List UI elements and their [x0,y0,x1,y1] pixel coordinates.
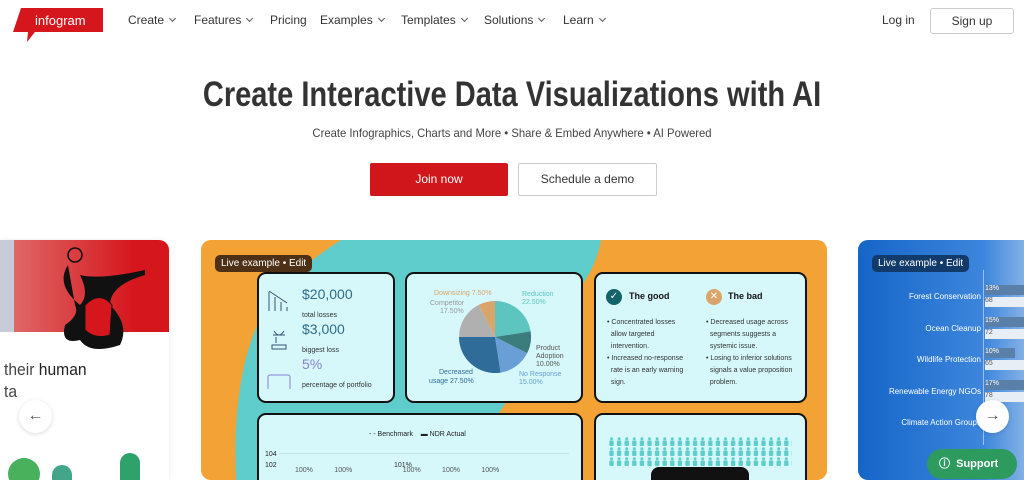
card: right: Forest Conservation [909,292,981,301]
join button [370,163,508,196]
card: right: Live example • Edit [878,258,963,269]
panel: people pictogram [594,413,807,480]
panel: good and bad: rate is an early warning [611,367,683,374]
card text [4,360,87,401]
panel: line chart [257,413,583,480]
card text: ta [4,382,17,401]
panel: line chart: 104 [265,451,277,458]
card: right: 13% [985,285,999,292]
card text: their human [4,360,87,379]
panel: pie chart: usage 27.50% [429,378,474,385]
card: center infographic [201,240,827,480]
panel: good and bad: systemic issue. [710,343,757,350]
panel: pie chart: 17.50% [440,308,464,315]
panel: pie chart: 10.00% [536,361,560,368]
icon: check [606,289,622,305]
card: right: 78 [985,392,993,399]
arrow: right [976,400,1009,433]
icon: cross: ✕ [710,291,718,302]
support button: ⓘ Support [939,458,998,470]
panel: good and bad: The bad [728,291,763,301]
panel: pie chart: No Response [519,371,562,378]
demo button [518,163,657,196]
panel: pie chart: Reduction [522,291,554,298]
sign up button [930,8,1014,34]
panel: pie chart: Competitor [430,300,465,307]
title: Create Interactive Data Visualizations with AI [203,75,821,114]
subtitle: Create Infographics, Charts and More • Share & Embed Anywhere • AI Powered [312,126,712,140]
nav menu: Pricing [270,13,307,27]
join button: Join now [415,172,463,186]
arrow: left [19,400,52,433]
logo [13,8,103,42]
panel: stats: percentage of portfolio [302,382,372,389]
panel: stats: total losses [302,312,337,319]
nav menu: Examples [320,13,373,27]
bottom decorations [120,453,140,480]
icon: check: ✓ [610,291,618,302]
card: right [858,240,1024,480]
nav menu: Features [194,13,241,27]
arrow: right: → [984,407,1000,424]
panel: pie chart: Adoption [536,353,564,360]
nav menu: Learn [563,13,594,27]
header image [0,240,169,332]
panel: good and bad [594,272,807,403]
panel: good and bad: • Concentrated losses [607,319,675,326]
panel: good and bad: sign. [611,379,626,386]
panel: good and bad: signals a value proposition [710,367,792,374]
badge: Live example • Edit [221,258,306,269]
login: Log in [882,13,915,27]
panel: pie chart: Decreased [439,369,473,376]
panel: stats: biggest loss [302,347,339,354]
panel: stats: $20,000 [302,286,353,302]
panel: good and bad: intervention. [611,343,649,350]
panel: pie chart: Product [536,345,560,352]
nav menu [128,13,606,27]
demo button: Schedule a demo [541,172,634,186]
card: right: 15% [985,317,999,324]
badge [215,255,312,272]
panel: good and bad: allow targeted [611,331,654,338]
background shapes [235,240,601,480]
panel: stats: $3,000 [302,321,345,337]
nav menu: Create [128,13,164,27]
card: right: 17% [985,380,999,387]
panel: good and bad: • Decreased usage across [706,319,788,326]
arrow: left: ← [28,407,44,424]
card: right: Renewable Energy NGOs [889,387,981,396]
card: right: Climate Action Groups [901,418,981,427]
panel: good and bad: segments suggests a [710,331,776,338]
panel: stats [257,272,395,403]
card: right: 65 [985,360,993,367]
card: right: 68 [985,297,993,304]
card: right: Ocean Cleanup [925,324,981,333]
panel: line chart: 102 [265,462,277,469]
panel: line chart: 101% [394,462,412,469]
panel: pie chart [405,272,583,403]
panel: good and bad: The good [629,291,670,301]
panel: stats: 5% [302,356,322,372]
panel: good and bad: • Losing to inferior solutions [706,355,792,362]
support button [927,449,1017,479]
card: right: Wildlife Protection [917,355,981,364]
card: right: 10% [985,348,999,355]
nav menu: Templates [401,13,456,27]
logo: infogram [35,13,86,28]
card: left [0,240,169,480]
card: right: 72 [985,329,993,336]
panel: good and bad: problem. [710,379,737,386]
sign up button: Sign up [952,14,992,28]
panel: pie chart: 15.00% [519,379,543,386]
icon: cross [706,289,722,305]
panel: line chart: - - Benchmark ▬ NDR Actual [369,431,466,438]
panel: good and bad: • Increased no-response [607,355,683,362]
panel: line chart: 100% 100% 100% 100% 100% [295,467,499,474]
panel: pie chart: Downsizing 7.50% [434,290,492,297]
nav menu: Solutions [484,13,533,27]
panel: pie chart: 22.50% [522,299,546,306]
